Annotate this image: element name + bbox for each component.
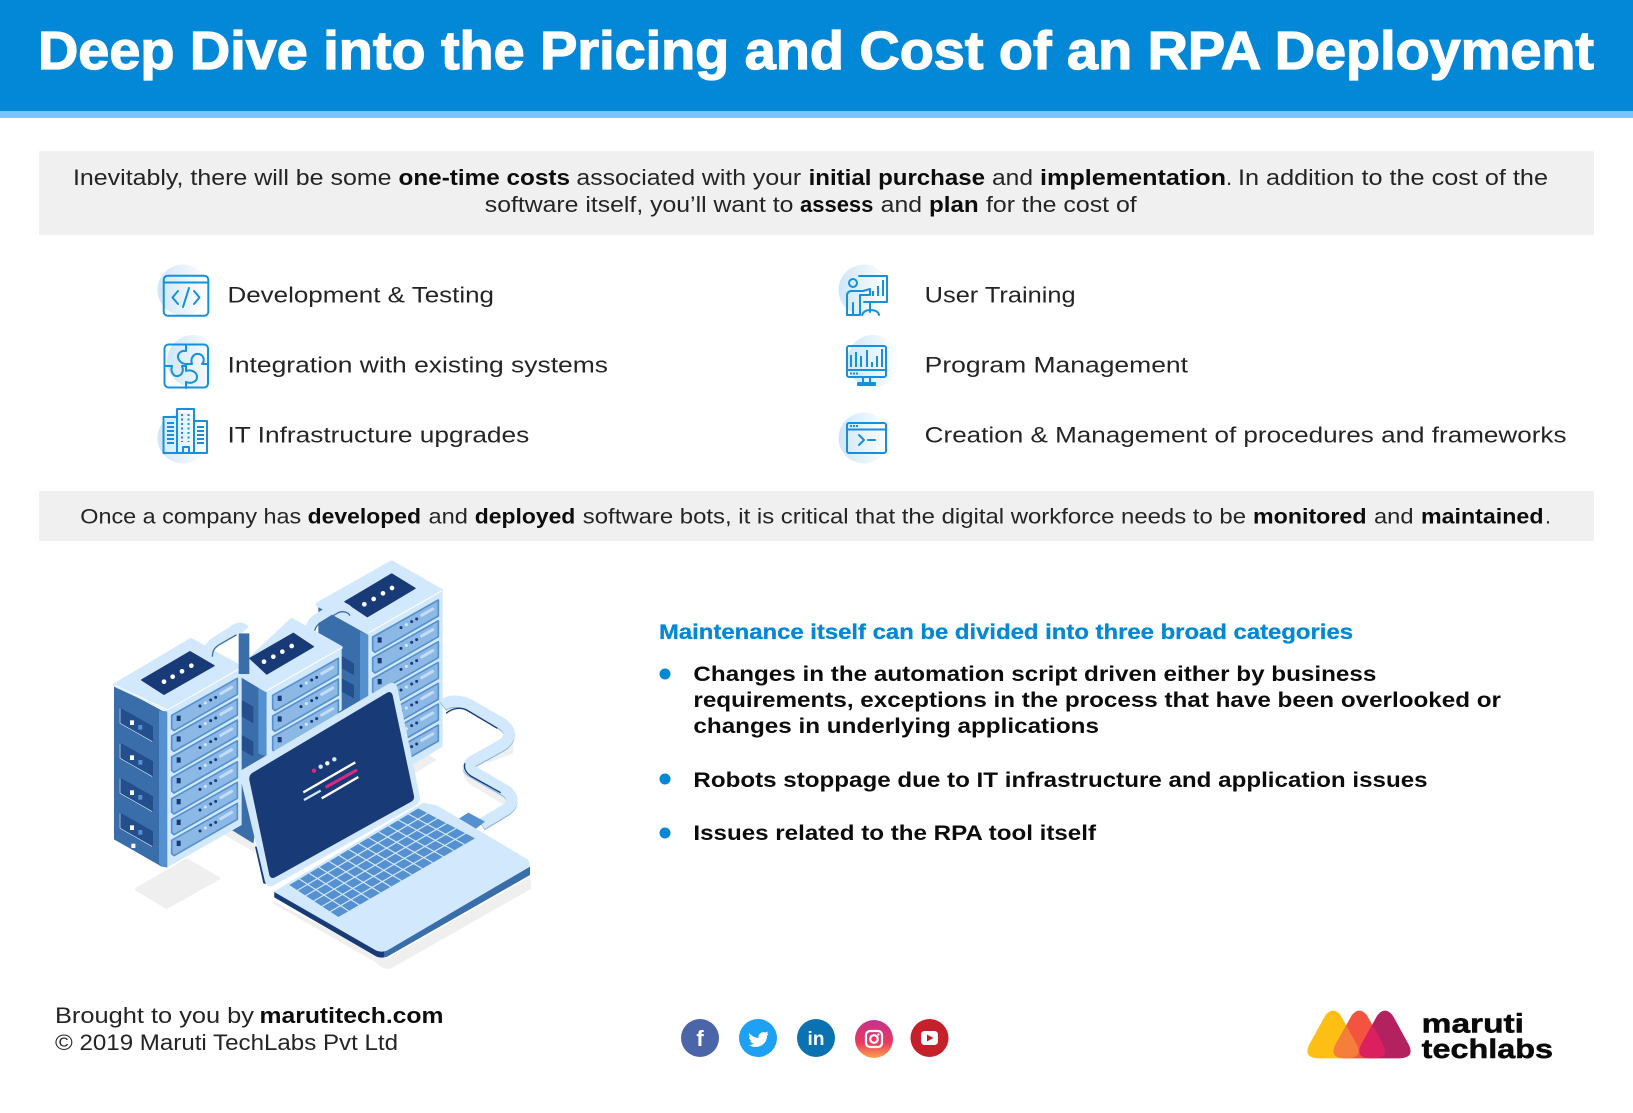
- panel: intro text: and: [992, 165, 1033, 190]
- label: procedures and frameworks: Creation & Management of procedures and frameworks: [925, 422, 1566, 448]
- screen content: [303, 757, 358, 800]
- illustration: servers and laptop: [114, 562, 530, 968]
- panel: intro text: and: [881, 192, 922, 217]
- laptop base top: [275, 803, 529, 951]
- title: Deep Dive into the Pricing and Cost of an RPA Deployment: [38, 22, 1594, 81]
- panel: maintenance categories: [659, 620, 1502, 845]
- icon: instagram: [855, 1020, 893, 1058]
- icon: twitter: [739, 1019, 777, 1057]
- label: IT infrastructure: IT Infrastructure upgrades: [228, 422, 529, 448]
- panel: intro text: assess: [800, 192, 873, 217]
- panel: intro text: In addition to the cost of the: [1238, 165, 1548, 190]
- label: development and testing: Development & Testing: [228, 282, 494, 308]
- icon: facebook: [681, 1019, 719, 1057]
- icon: integration puzzle: [164, 335, 219, 388]
- icon: user training: [838, 264, 890, 316]
- label: program management: Program Management: [925, 352, 1188, 378]
- keyboard: [289, 808, 475, 917]
- footer credit: Brought to you by: [55, 1003, 254, 1028]
- icon: linkedin: in: [808, 1029, 824, 1050]
- panel: monitoring statement: deployed: [475, 504, 575, 528]
- panel: intro text: associated with your: [576, 165, 801, 190]
- panel: monitoring statement: and: [1374, 504, 1414, 528]
- panel: intro text: initial purchase: [809, 165, 985, 190]
- icon: linkedin: [797, 1019, 835, 1057]
- logo: maruti techlabs: [1307, 1010, 1552, 1058]
- laptop: [240, 683, 530, 958]
- cable between left and middle servers: [208, 628, 245, 674]
- panel: intro text: software itself, you’ll want to: [485, 192, 793, 217]
- panel: intro text: for the cost of: [986, 192, 1138, 217]
- bullet three: Issues related to the RPA tool itself: [693, 821, 1097, 845]
- icon: IT infrastructure building: [158, 409, 208, 464]
- bullet one: changes in underlying applications: [693, 714, 1099, 738]
- panel: intro text: [39, 151, 1594, 235]
- icon: procedures terminal window: [838, 412, 890, 464]
- laptop base side: [274, 867, 530, 958]
- cable between middle and right servers: [310, 607, 350, 631]
- footer credit: © 2019 Maruti TechLabs Pvt Ltd: [55, 1030, 398, 1055]
- panel: monitoring statement: and: [428, 504, 468, 528]
- panel: monitoring statement: monitored: [1253, 504, 1366, 528]
- bullet one: requirements, exceptions in the process that have been overlooked or: [693, 688, 1502, 712]
- panel: monitoring statement: software bots, it is critical that the digital workforce needs to be: [583, 504, 1246, 528]
- header banner: [0, 0, 1633, 118]
- panel: monitoring statement: developed: [308, 504, 421, 528]
- footer credit: [55, 1003, 444, 1055]
- left server: [114, 640, 242, 867]
- label: user training: User Training: [925, 282, 1076, 308]
- panel: monitoring statement: maintained: [1421, 504, 1544, 528]
- bullet one: [660, 662, 1502, 738]
- panel: intro text: implementation: [1040, 165, 1226, 190]
- panel: intro text: Inevitably, there will be some: [73, 165, 392, 190]
- panel: intro text: plan: [929, 192, 979, 217]
- icon: youtube: [910, 1019, 948, 1057]
- maintenance heading: Maintenance itself can be divided into three broad categories: [659, 620, 1353, 644]
- laptop screen: [255, 847, 267, 884]
- cable connector: [457, 813, 485, 831]
- icon: program management monitor: [847, 335, 899, 387]
- logo: maruti techlabs: maruti: [1422, 1008, 1524, 1038]
- icon: facebook: f: [696, 1026, 704, 1051]
- right server: [317, 562, 443, 777]
- panel: monitoring statement: [39, 491, 1594, 541]
- ground shadows: [137, 738, 530, 968]
- panel: intro text: .: [1226, 165, 1232, 190]
- panel: monitoring statement: Once a company has: [80, 504, 301, 528]
- icon: development and testing: [158, 264, 208, 316]
- panel: intro text: one-time costs: [398, 165, 570, 190]
- panel: monitoring statement: .: [1545, 504, 1551, 528]
- bullet two: Robots stoppage due to IT infrastructure and application issues: [693, 768, 1428, 792]
- footer credit: marutitech.com: [260, 1003, 444, 1028]
- logo: maruti techlabs: techlabs: [1422, 1034, 1553, 1064]
- cable from right server to laptop: [443, 701, 512, 825]
- label: integration: Integration with existing systems: [228, 352, 608, 378]
- bullet one: Changes in the automation script driven either by business: [693, 662, 1376, 686]
- middle server: [232, 620, 342, 843]
